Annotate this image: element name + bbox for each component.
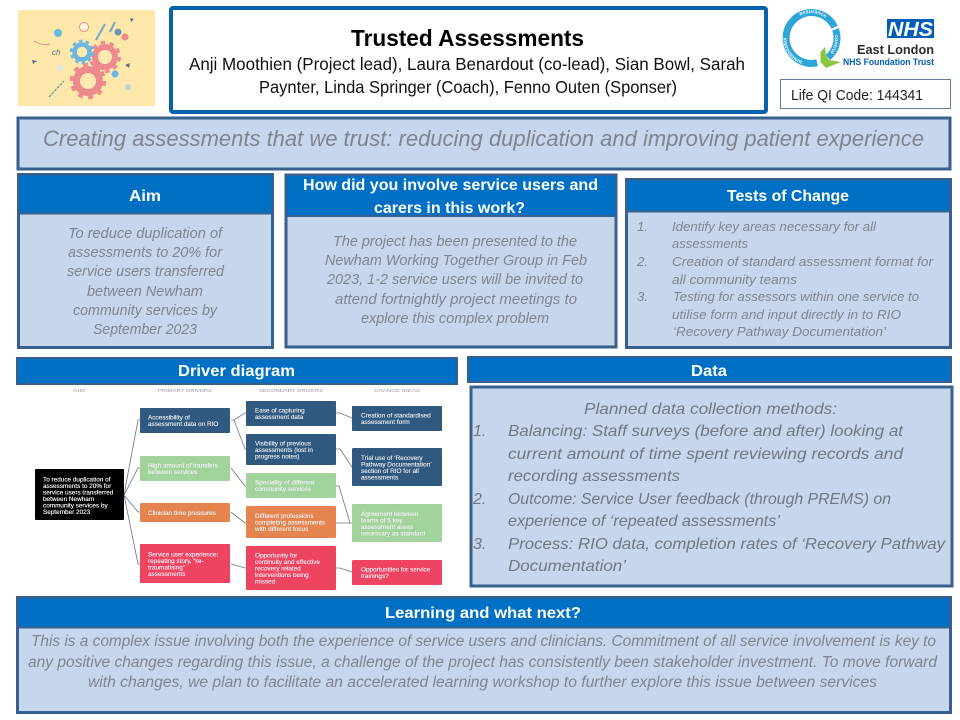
primary driver: service user experience: Service user experience: [148, 552, 219, 558]
change idea: trial: assessments [361, 474, 398, 482]
column labels: AIM [73, 388, 85, 394]
secondary driver: ease of capture: assessment data [255, 414, 304, 421]
column labels: SECONDARY DRIVERS [259, 388, 323, 394]
icon: NHS East London logo: NHS Foundation Trust [843, 57, 934, 67]
icon: QI logo: control [830, 35, 838, 54]
primary driver: service user experience [140, 544, 230, 583]
change idea: agreement: necessary as standard [361, 530, 426, 538]
icon: NHS East London logo [843, 19, 934, 67]
change idea: trainings: trainings? [361, 573, 389, 580]
panel: title [171, 8, 766, 112]
data list: Balancing: Staff surveys (before and after) looking at [508, 423, 904, 440]
involvement text: Newham Working Together Group in Feb [325, 253, 587, 269]
aim box: between Newham [43, 496, 94, 503]
involvement text [325, 234, 587, 327]
primary driver: transfers: between services [148, 469, 197, 476]
column labels [73, 388, 420, 394]
panel: tagline [18, 118, 950, 169]
secondary driver: professions: completing assessments [255, 520, 325, 526]
column labels: PRIMARY DRIVERS [158, 388, 212, 394]
secondary driver: visibility: Visibility of previous [255, 440, 311, 448]
primary driver: service user experience: traumatising” [148, 564, 185, 572]
primary driver: service user experience: assessments [148, 571, 185, 578]
tests list: 1. [637, 219, 648, 234]
tests list: all community teams [672, 272, 797, 287]
panel: data [471, 387, 952, 586]
tests list: 2. [636, 254, 648, 269]
primary driver: accessibility: assessment data on RIO [148, 421, 218, 428]
secondary driver: specialty [246, 473, 336, 498]
secondary driver: ease of capture [246, 401, 336, 426]
data list: experience of ‘repeated assessments’ [508, 513, 780, 530]
icon: NHS East London logo: East London [857, 43, 934, 57]
primary driver: accessibility: Accessibility of [148, 414, 190, 422]
primary driver: service user experience: repeating story, “re- [148, 558, 203, 565]
icon: QI logo: improvement [783, 38, 802, 64]
data subheading: Planned data collection methods: [584, 401, 837, 418]
primary driver: time pressures [140, 503, 230, 522]
aim box: To reduce duplication of [43, 476, 111, 484]
authors: Anji Moothien (Project lead), Laura Benardout (co-lead), Sian Bowl, Sarah [189, 54, 745, 74]
panel: aim [18, 174, 272, 348]
primary driver: time pressures: Clinician time pressures [148, 510, 216, 517]
icon: QI logo: assurance [799, 10, 826, 18]
heading: driver diagram: Driver diagram [178, 363, 295, 380]
data list: 2. [472, 491, 486, 508]
data list: 3. [473, 536, 486, 553]
authors: Paynter, Linda Springer (Coach), Fenno Outen (Sponser) [259, 77, 677, 97]
data list [472, 423, 946, 575]
involvement text: The project has been presented to the [333, 234, 577, 250]
primary driver: transfers [140, 456, 230, 481]
secondary driver: professions: with different focus [254, 526, 308, 533]
tests list [636, 219, 934, 339]
secondary driver: opportunity: interventions being [255, 572, 309, 579]
tests list: assessments [672, 236, 748, 251]
heading: tests of change: Tests of Change [727, 188, 849, 205]
title: Trusted Assessments [351, 25, 584, 51]
change idea: standard form: assessment form [361, 419, 410, 426]
Life QI code box: Life QI Code: 144341 [791, 87, 923, 104]
aim box: assessments to 20% for [43, 483, 112, 490]
secondary driver: visibility: assessments (lost in [255, 447, 313, 454]
tests list: 3. [637, 289, 648, 304]
aim text: To reduce duplication of [68, 226, 224, 242]
change idea: trainings: Opportunities for service [361, 566, 431, 574]
icon: QI logo [782, 9, 841, 68]
learning text: with changes, we plan to facilitate an accelerated learning workshop to further explore this issue between services [88, 674, 877, 691]
heading: driver diagram [17, 358, 457, 384]
primary driver: accessibility [140, 408, 230, 433]
data list: current amount of time spent reviewing records and [508, 446, 904, 463]
Life QI code box [780, 80, 950, 108]
change idea: standard form: Creation of standardised [361, 412, 431, 420]
secondary driver: opportunity: missed [255, 578, 276, 586]
aim text: assessments to 20% for [68, 245, 223, 261]
icon: gears illustration [18, 10, 155, 106]
column labels: CHANGE IDEAS [374, 388, 420, 394]
secondary driver: ease of capture: Ease of capturing [255, 408, 305, 414]
heading: involvement: carers in this work? [374, 200, 525, 217]
secondary driver: professions: Different professions [255, 513, 314, 520]
data list: Process: RIO data, completion rates of ‘Recovery Pathway [508, 536, 946, 553]
heading: data [468, 357, 951, 382]
change idea: agreement: teams of 5 key [361, 518, 403, 524]
heading: learning: Learning and what next? [385, 605, 581, 622]
change idea: agreement [352, 504, 442, 542]
panel: tests of change [626, 180, 950, 348]
driver diagram [35, 388, 442, 590]
change idea: trial: section of RIO for all [361, 468, 419, 475]
secondary driver: professions [246, 506, 336, 538]
aim box: service users transferred [43, 490, 114, 496]
learning text: any positive changes regarding this issue, a challenge of the project has consistently been stakeholder investment. To move forward [28, 654, 938, 671]
aim text: between Newham [87, 284, 203, 300]
secondary driver: opportunity: Opportunity for [255, 552, 298, 560]
panel: service user involvement [286, 175, 616, 347]
secondary driver: visibility: progress notes) [255, 454, 299, 460]
heading: involvement: How did you involve service users and [303, 177, 598, 194]
aim box: September 2023 [43, 509, 91, 516]
secondary driver: specialty: community services [255, 486, 311, 493]
connectors [124, 413, 352, 572]
tests list: ‘Recovery Pathway Documentation’ [673, 324, 887, 339]
panel: tagline: Creating assessments that we trust: reducing duplication and improving patient experience [43, 126, 924, 151]
primary driver: transfers: High amount of transfers [148, 462, 218, 470]
secondary driver: opportunity [246, 546, 336, 590]
change idea: trial [352, 448, 442, 486]
aim box: community services by [43, 502, 108, 510]
aim text: September 2023 [93, 322, 198, 338]
aim text: community services by [73, 303, 219, 319]
secondary driver: visibility [246, 434, 336, 465]
heading: aim: Aim [129, 188, 161, 205]
secondary driver: opportunity: recovery related [255, 566, 301, 572]
icon: gears illustration: ch [52, 48, 61, 57]
change idea: trial: Trial use of ‘Recovery [361, 455, 423, 462]
data list: Outcome: Service User feedback (through PREMS) on [508, 491, 891, 508]
authors [189, 54, 745, 97]
learning text [28, 633, 938, 691]
tests list: utilise form and input directly in to RIO [672, 307, 901, 322]
icon: NHS East London logo: NHS [888, 19, 934, 41]
involvement text: 2023, 1-2 service users will be invited to [326, 272, 583, 288]
aim text: service users transferred [67, 264, 225, 280]
involvement text: explore this complex problem [361, 311, 549, 327]
data list: recording assessments [508, 468, 680, 485]
change idea: agreement: assessment areas [361, 524, 413, 531]
change idea: trainings [352, 560, 442, 585]
heading: involvement [303, 177, 598, 217]
data list: 1. [473, 423, 486, 440]
tests list: Testing for assessors within one service to [673, 289, 919, 304]
tests list: Identify key areas necessary for all [672, 219, 877, 234]
aim box [35, 469, 124, 520]
tests list: Creation of standard assessment format for [672, 254, 934, 269]
change idea: agreement: Agreement between [361, 511, 419, 518]
data list: Documentation’ [508, 558, 626, 575]
secondary driver: opportunity: continuity and effective [255, 559, 320, 566]
change idea: trial: Pathway Documentation’ [361, 462, 432, 468]
heading: data: Data [691, 363, 727, 380]
panel: learning and what next [18, 598, 950, 712]
change idea: standard form [352, 406, 442, 431]
involvement text: attend fortnightly project meetings to [335, 292, 577, 308]
learning text: This is a complex issue involving both the experience of service users and clinicians. Commitment of all service involvement is key to [31, 633, 936, 650]
aim text [67, 226, 225, 338]
secondary driver: specialty: Speciality of different [255, 480, 314, 486]
